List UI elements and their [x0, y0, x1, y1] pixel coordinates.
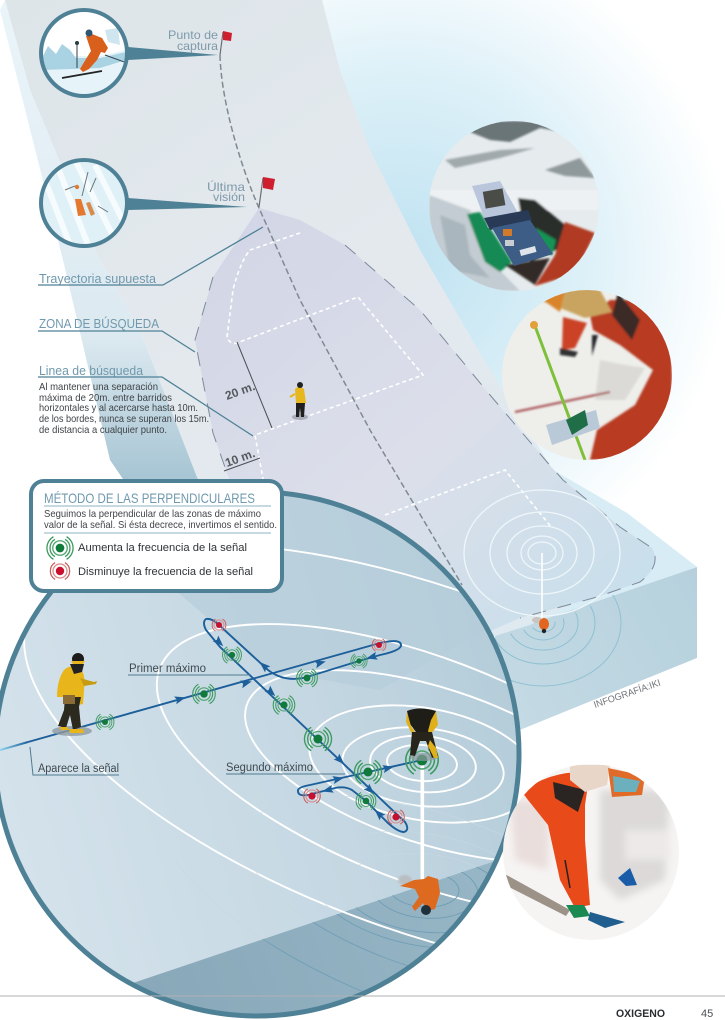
sky glow — [300, 0, 725, 570]
label: primer maximo: Primer máximo — [129, 663, 206, 675]
panel lower rule — [44, 532, 271, 534]
label: punto de captura — [168, 28, 218, 53]
zone dashed outline — [195, 245, 655, 618]
light snow lip — [495, 470, 697, 636]
legend icon: increasing — [47, 537, 73, 559]
label: linea de busqueda — [38, 363, 253, 436]
label: zona de busqueda — [38, 316, 195, 352]
label: aparece la senal: Aparece la señal — [38, 763, 119, 775]
label: primer maximo — [128, 663, 250, 675]
footer: magazine name: OXIGENO — [616, 1008, 665, 1020]
buried rings on the front face — [262, 867, 488, 992]
text: search line explanation: Al mantener una separación — [39, 381, 158, 393]
legend text: decreasing: Disminuye la frecuencia de la señal — [78, 566, 253, 578]
photo: probe and receiver — [502, 288, 672, 460]
photo: receiver in gloved hands — [429, 121, 599, 291]
label: ultima vision: visión — [213, 190, 245, 204]
figure: rescuer bending — [406, 708, 438, 761]
lens front face — [134, 862, 493, 1014]
panel body line two: valor de la señal. Si ésta decrece, invertimos el sentido. — [44, 519, 277, 531]
block front face — [495, 567, 697, 738]
signal drop line — [420, 765, 424, 885]
text: search line explanation: de distancia a cualquier punto. — [39, 424, 167, 436]
dimension: 20 m: 20 m. — [223, 379, 257, 403]
label: aparece la senal — [30, 747, 119, 775]
text: search line explanation: de los bordes, nunca se superan los 15m. — [39, 413, 209, 425]
panel frame — [31, 481, 282, 591]
flag: last sight — [259, 177, 275, 207]
label: punto de captura: Punto de — [168, 28, 218, 42]
dimension: 20 m — [223, 342, 272, 428]
supposed trajectory — [220, 55, 462, 585]
legend text: increasing: Aumenta la frecuencia de la señal — [78, 542, 247, 554]
surface rings — [464, 490, 620, 616]
label: trayectoria supuesta — [38, 227, 263, 286]
text: search line explanation — [39, 381, 209, 436]
text: search line explanation: máxima de 20m. entre barridos — [39, 392, 172, 404]
dimension: 10 m: 10 m. — [223, 446, 257, 470]
panel heading rule — [44, 505, 271, 507]
markers: increasing signal — [96, 647, 438, 810]
panel body line one: Seguimos la perpendicular de las zonas de máximo — [44, 508, 261, 520]
figure: rescuer with receiver — [52, 653, 97, 736]
legend icon: decreasing — [50, 563, 70, 579]
flag: capture — [220, 31, 232, 55]
label: trayectoria supuesta: Trayectoria supuesta — [39, 271, 157, 286]
label: ultima vision: Última — [207, 179, 245, 194]
signal line small — [541, 553, 543, 620]
footer rule — [0, 995, 725, 997]
panel heading: MÉTODO DE LAS PERPENDICULARES — [44, 490, 255, 506]
inset: fall — [41, 160, 127, 250]
footer: page number: 45 — [701, 1008, 713, 1020]
rescuer small — [290, 382, 308, 420]
search zone — [195, 208, 655, 640]
inset: skier — [41, 10, 127, 96]
search line dashed — [227, 233, 552, 528]
lens upper slope band — [179, 528, 336, 682]
label: ultima vision — [207, 179, 245, 204]
credit: INFOGRAFÍA:IKI — [592, 678, 662, 711]
slope surface — [5, 0, 697, 700]
label: punto de captura: captura — [177, 39, 218, 53]
small victim — [532, 617, 549, 633]
panel: method of perpendiculars — [31, 481, 282, 591]
wedge: capture — [128, 47, 218, 60]
rings around the signal — [23, 548, 516, 944]
label: zona de busqueda: ZONA DE BÚSQUEDA — [39, 316, 159, 331]
slope side band — [0, 0, 240, 482]
photo: shovelling snow — [503, 764, 679, 940]
figure: buried victim — [398, 875, 440, 915]
path: search route — [0, 619, 422, 832]
buried rings — [494, 594, 622, 686]
label: linea de busqueda: Linea de búsqueda — [39, 363, 144, 378]
panel: magnifier lens — [0, 490, 522, 1018]
label: segundo maximo: Segundo máximo — [226, 762, 313, 774]
markers: decreasing signal — [212, 619, 404, 824]
text: search line explanation: horizontales y al acercarse hasta 10m. — [39, 402, 198, 414]
wedge: last sight — [128, 198, 247, 210]
buried rings, faint on surface — [256, 796, 503, 908]
